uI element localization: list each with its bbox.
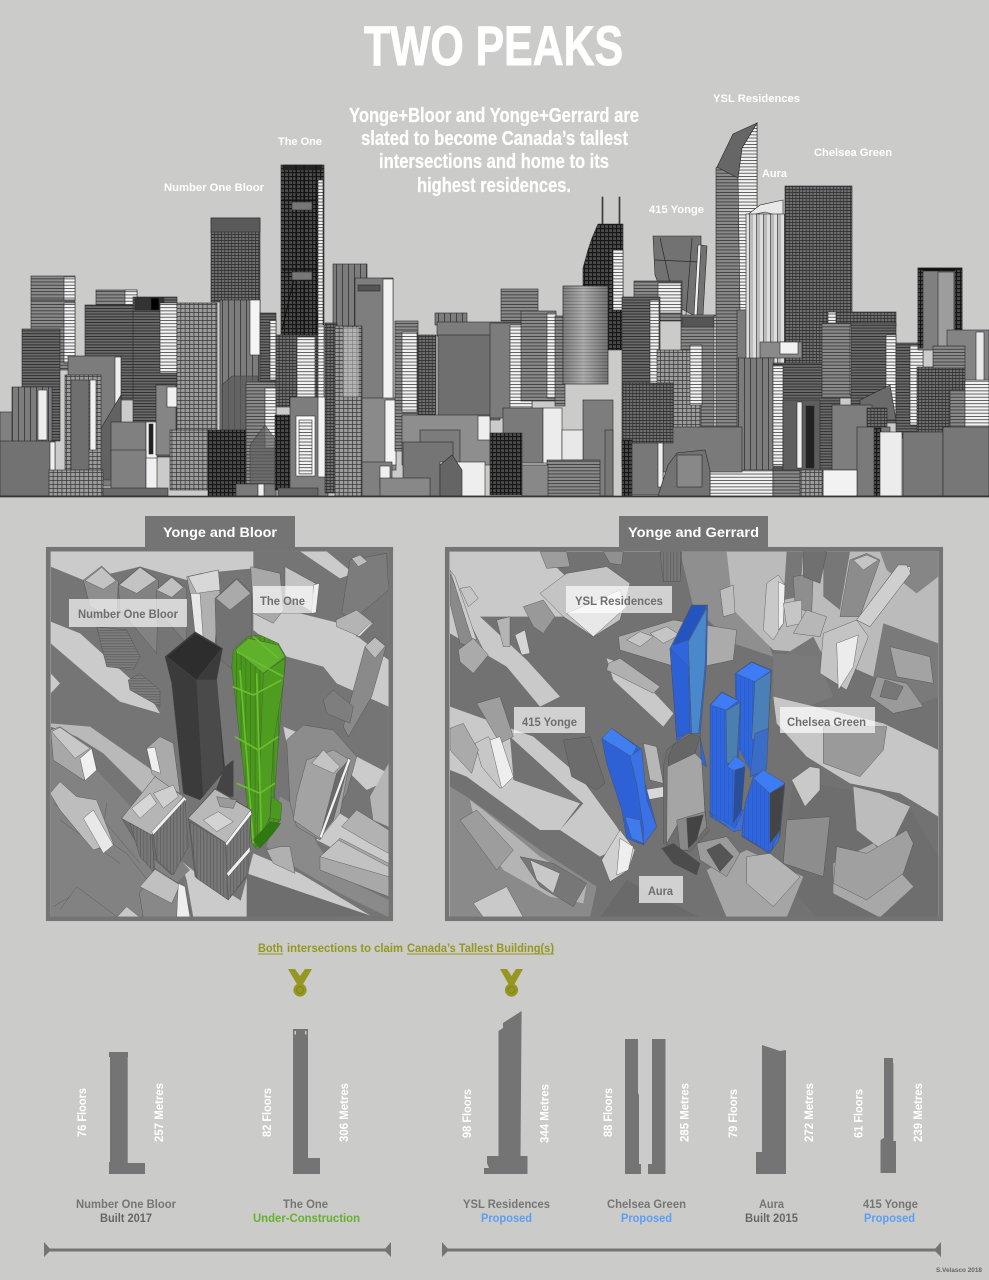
Chelsea Green towers [735, 662, 785, 853]
tallest building caption: Canada’s Tallest Building(s) [407, 943, 554, 955]
heading: Yonge and Gerrard [619, 516, 768, 548]
callout: The One [253, 586, 313, 613]
callout: The One: The One [260, 594, 305, 608]
building names and status: 415 Yonge [863, 1197, 918, 1211]
building names and status: Built 2017 [100, 1211, 152, 1225]
label: Number One Bloor: Number One Bloor [164, 182, 265, 194]
stats: floors and metres: 285 Metres [678, 1083, 692, 1142]
stats: floors and metres: 79 Floors [726, 1089, 740, 1138]
stats: floors and metres: 61 Floors [852, 1089, 866, 1138]
tallest building caption: intersections to claim [287, 943, 403, 955]
callout: Aura: Aura [648, 884, 673, 898]
label: Aura: Aura [762, 168, 788, 180]
panel: Yonge and Bloor map [48, 549, 391, 919]
heading: Yonge and Bloor: Yonge and Bloor [163, 524, 278, 540]
green tower: The One [232, 635, 286, 849]
stats: floors and metres: 76 Floors [75, 1088, 89, 1137]
silhouette: YSL Residences [484, 1011, 528, 1174]
YSL tower [670, 605, 708, 767]
callout: Number One Bloor: Number One Bloor [78, 607, 178, 621]
callout: Chelsea Green [780, 707, 875, 733]
heading: Yonge and Bloor [145, 516, 295, 548]
stats: floors and metres: 239 Metres [911, 1083, 925, 1142]
intro text block: highest residences. [417, 175, 571, 197]
stats: floors and metres: 272 Metres [802, 1083, 816, 1142]
stats: floors and metres: 98 Floors [460, 1089, 474, 1138]
stats: floors and metres: 306 Metres [337, 1083, 351, 1142]
415 Yonge tower [602, 728, 657, 845]
stats: floors and metres: 257 Metres [152, 1083, 166, 1142]
building names and status: Aura [759, 1197, 784, 1211]
silhouette: Aura [756, 1045, 786, 1174]
label: YSL Residences: YSL Residences [713, 93, 800, 105]
intro text block: intersections and home to its [379, 151, 609, 173]
Aura tower [663, 733, 710, 852]
bg buildings top row [83, 566, 118, 620]
bg buildings [540, 567, 630, 637]
front towers [122, 777, 187, 875]
label: 415 Yonge: 415 Yonge [649, 204, 704, 216]
stats: floors and metres: 82 Floors [260, 1088, 274, 1137]
icon: medal, YSL Residences [500, 969, 523, 997]
tallest building caption: Both [258, 943, 283, 955]
building names and status: Built 2015 [745, 1211, 798, 1225]
silhouette: The One [293, 1029, 320, 1174]
map frame [48, 549, 391, 919]
stats: floors and metres: 344 Metres [538, 1084, 552, 1143]
tallest building caption [258, 943, 554, 955]
building names and status: Proposed [864, 1211, 915, 1225]
callout: YSL Residences [566, 586, 672, 613]
intro text block: slated to become Canada’s tallest [361, 128, 628, 150]
callout: Number One Bloor [69, 599, 187, 627]
skyline illustration [0, 123, 989, 497]
building names and status: YSL Residences [463, 1197, 550, 1211]
building names and status: Proposed [481, 1211, 532, 1225]
black tower: Number One Bloor [165, 632, 225, 800]
building names and status: Proposed [621, 1211, 672, 1225]
map frame [447, 549, 941, 919]
label: Chelsea Green: Chelsea Green [814, 147, 892, 159]
intro text block: Yonge+Bloor and Yonge+Gerrard are [349, 105, 639, 127]
callout: YSL Residences: YSL Residences [575, 594, 663, 608]
silhouette: 415 Yonge [880, 1058, 896, 1173]
building names and status: Number One Bloor [76, 1197, 176, 1211]
bracket: Yonge and Bloor [44, 1242, 391, 1257]
building names and status: Chelsea Green [607, 1197, 686, 1211]
callout: Chelsea Green: Chelsea Green [787, 715, 866, 729]
silhouette: Chelsea Green [625, 1039, 666, 1174]
credit: S.Velasco 2018 [936, 1268, 983, 1274]
intro text block [349, 105, 639, 197]
bracket: Yonge and Gerrard [442, 1242, 941, 1257]
title: TWO PEAKS [364, 14, 623, 77]
building names and status: Under-Construction [253, 1211, 360, 1225]
label: The One: The One [278, 136, 322, 148]
icon: medal, The One [288, 969, 312, 997]
stats: floors and metres: 88 Floors [601, 1088, 615, 1137]
callout: Aura [639, 876, 683, 903]
callout: 415 Yonge: 415 Yonge [522, 715, 577, 729]
stats: floors and metres [75, 1083, 925, 1143]
heading: Yonge and Gerrard: Yonge and Gerrard [628, 524, 759, 540]
silhouette: Number One Bloor [109, 1052, 145, 1174]
panel: Yonge and Gerrard map [447, 549, 941, 919]
building names and status: The One [283, 1197, 328, 1211]
callout: 415 Yonge [514, 707, 585, 733]
building names and status [76, 1197, 918, 1225]
